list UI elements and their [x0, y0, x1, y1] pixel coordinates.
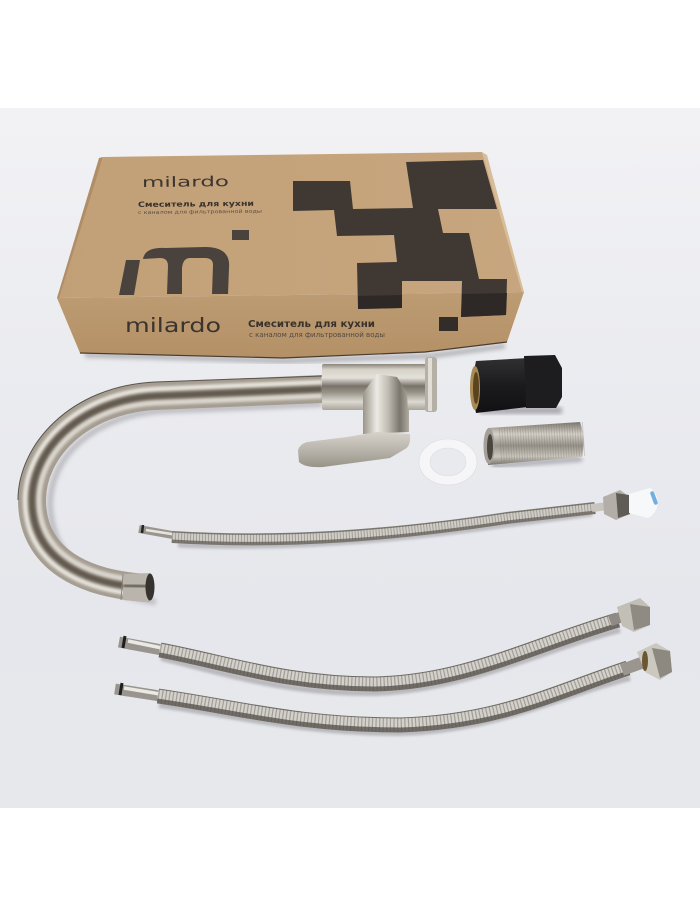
nipple shadow	[492, 459, 582, 466]
lid brand name: milardo	[142, 174, 229, 191]
hose tip fitting	[119, 642, 162, 650]
spout edge line	[18, 376, 322, 500]
hose shadow	[178, 514, 592, 546]
box side flaps	[57, 157, 103, 298]
hose tip fitting	[139, 529, 178, 536]
mixer body	[322, 364, 427, 410]
hose braid	[160, 620, 618, 684]
hose braid	[172, 508, 595, 539]
faucet shadow	[50, 404, 322, 602]
hose tip fitting	[115, 689, 160, 696]
box bottom edge	[80, 342, 507, 358]
adapter nut	[524, 355, 562, 408]
cardboard box	[57, 152, 524, 361]
spout inner highlight	[39, 396, 322, 581]
hose shadow	[161, 630, 620, 693]
hose nut	[603, 490, 630, 520]
lid product subtitle: с каналом для фильтрованной воды	[138, 208, 262, 216]
lid product title: Смеситель для кухни	[138, 199, 254, 209]
mixer neck	[363, 374, 409, 434]
spout outer highlight	[25, 382, 322, 595]
white push-fit connector	[629, 488, 658, 518]
filter hose	[139, 488, 658, 546]
spout tube base	[32, 389, 322, 588]
long hose middle	[119, 598, 650, 693]
mixer flange	[425, 357, 437, 412]
box shadow	[85, 346, 505, 361]
black threaded adapter	[470, 355, 562, 414]
adapter brass insert	[470, 366, 480, 410]
lever handle	[298, 432, 410, 467]
photo backdrop	[0, 108, 700, 808]
front product subtitle: с каналом для фильтрованной воды	[249, 331, 385, 339]
logo mark m	[119, 230, 249, 295]
box front face	[57, 292, 524, 358]
front brand name: milardo	[125, 314, 221, 337]
hose nut	[610, 616, 624, 621]
hose ferrule	[592, 506, 608, 508]
hose nut	[622, 662, 644, 670]
nipple thread rings	[500, 439, 584, 445]
long hose lower	[115, 643, 672, 733]
box top face	[57, 152, 524, 298]
spout end cap	[123, 573, 153, 602]
threaded nipple	[484, 422, 584, 466]
pattern small square	[439, 317, 458, 331]
geometric pattern on lid	[293, 160, 507, 317]
mixer neck ring	[363, 406, 409, 432]
hose braid	[158, 668, 628, 725]
adapter sleeve	[473, 358, 528, 413]
hose shadow	[159, 678, 630, 733]
faucet	[18, 357, 437, 602]
nipple body	[488, 422, 584, 465]
nipple opening	[484, 428, 494, 464]
front product title: Смеситель для кухни	[248, 319, 375, 330]
adapter shadow	[480, 407, 562, 414]
pattern on front side	[358, 295, 402, 309]
rubber washer	[419, 439, 477, 485]
spout dark band	[32, 389, 322, 588]
